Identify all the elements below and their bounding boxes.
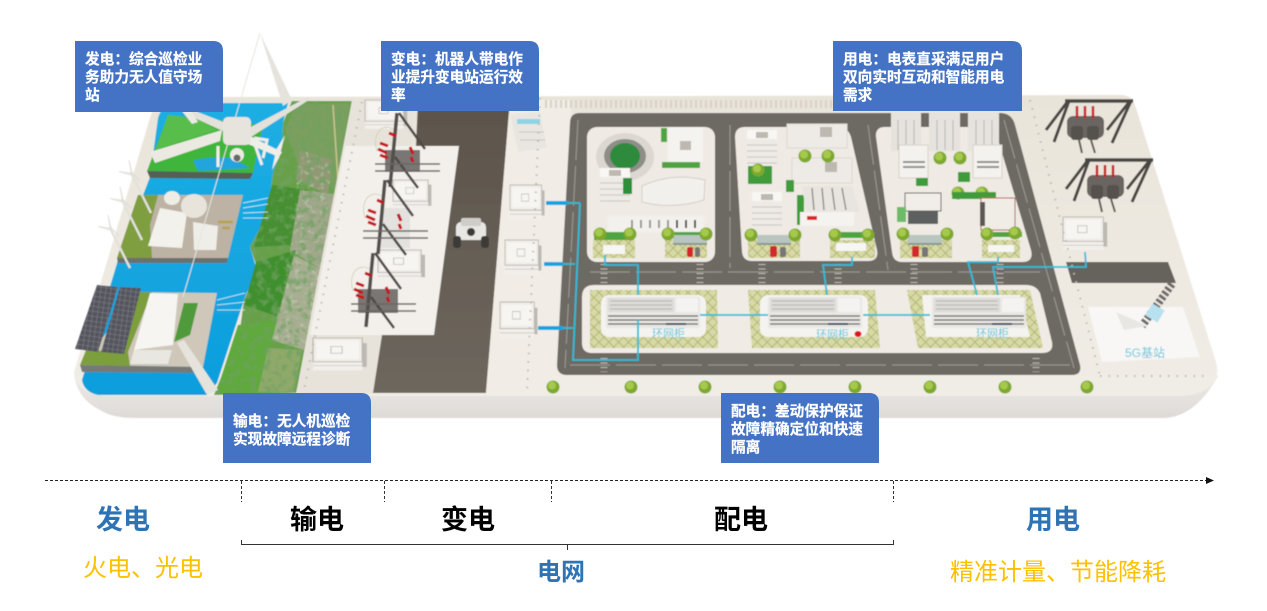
substation road: [373, 100, 510, 393]
stadium: [596, 133, 654, 181]
block 1 buildings: [593, 127, 712, 258]
distribution road network: [557, 113, 1080, 375]
concrete strip beside bank: [296, 100, 418, 394]
block 2: [735, 124, 877, 261]
stage dividers: [242, 481, 894, 502]
island: solar: [80, 292, 217, 373]
callout: substation: 率: [391, 86, 406, 104]
sublabel: consumption benefits: 精准计量、节能降耗: [950, 559, 1166, 586]
hatched ground 2: [748, 290, 880, 348]
timeline arrow: [45, 477, 1214, 484]
callout: consumption: 用电：电表直采满足用户: [843, 50, 1004, 68]
wind turbines: [98, 160, 151, 268]
label 3: 环网柜: [976, 327, 1009, 340]
callout: substation: 业提升变电站运行效: [391, 68, 523, 86]
sublabel: generation types: 火电、光电: [83, 555, 203, 582]
lower left arm: [150, 130, 222, 163]
5G tower: [1142, 284, 1172, 326]
label 2: 环网柜: [816, 328, 849, 341]
ring main unit 2: [768, 297, 862, 328]
street trees: [546, 380, 1094, 394]
bright foliage bottom: [216, 320, 276, 393]
drone camera: [230, 148, 244, 162]
stage label: transmission: 输电: [290, 505, 344, 535]
callout: distribution: 隔离: [731, 438, 760, 456]
callout: transmission: 实现故障远程诊断: [233, 430, 351, 448]
tower 3 transformer: [358, 289, 398, 313]
block 3 buildings: [891, 113, 1022, 258]
inner pad 2: [760, 295, 868, 337]
box 1: [510, 185, 545, 219]
rocky patch lower: [272, 255, 322, 350]
tower 1 transformer: [385, 150, 420, 172]
callout: consumption: 双向实时互动和智能用电: [843, 68, 1005, 86]
lower right arm: [248, 136, 282, 157]
forest speckle: [214, 101, 352, 395]
dense forest: [254, 185, 308, 247]
upper left arm: [186, 109, 226, 132]
illustrated grid scene: [74, 33, 1218, 418]
dish: [1116, 312, 1148, 330]
road markings: [565, 120, 1074, 368]
power wires over river: [217, 198, 268, 310]
hatched ground 1: [590, 290, 718, 348]
platform front face: [74, 368, 1218, 418]
solar panels: [75, 285, 141, 354]
grid bracket: [242, 540, 894, 550]
callout: generation: 务助力无人值守场: [85, 68, 203, 86]
drone legs: [218, 138, 267, 167]
drone flight line: [183, 33, 260, 297]
callout: generation: [75, 41, 223, 112]
inner pad 3: [922, 295, 1030, 337]
label: 5G基站: [1125, 346, 1165, 360]
callout: substation: [381, 41, 539, 111]
callout: substation: 变电：机器人带电作: [391, 50, 523, 68]
river bank terrain: [214, 101, 352, 395]
red indicator dot: [854, 331, 862, 337]
border tick marks: [304, 98, 1210, 392]
island: green hill: [147, 115, 263, 179]
label: grid: 电网: [537, 559, 585, 586]
pale foliage bottom right: [258, 348, 302, 392]
callout: transmission: 输电：无人机巡检: [233, 412, 351, 430]
inner pad 1: [601, 295, 706, 337]
live-line work robot: [453, 218, 489, 248]
bank base: [214, 101, 352, 395]
propeller lower right: [272, 135, 285, 170]
rocky patch middle: [290, 190, 334, 270]
top building: [510, 112, 547, 152]
lower blade: [177, 340, 218, 395]
callout: consumption: [833, 41, 1022, 111]
drone: [150, 33, 312, 395]
platform top surface: [74, 95, 1217, 396]
label 1: 环网柜: [652, 327, 685, 340]
rocky patch upper: [296, 150, 332, 195]
hatched ground 3: [907, 290, 1043, 348]
5G base station: [1088, 284, 1200, 362]
block 3: [876, 113, 1032, 262]
callout: distribution: 故障精确定位和快速: [731, 420, 863, 438]
drone body: [223, 117, 251, 145]
substation towers: [351, 113, 440, 328]
pale track: [333, 105, 339, 195]
pale transformer block: [380, 208, 410, 248]
propeller upper left: [178, 95, 198, 124]
distribution boxes: [500, 112, 547, 338]
upper pale vegetation: [285, 103, 350, 190]
box 3: [500, 302, 537, 338]
propeller blade tall: [260, 33, 292, 106]
island: thermal power: [117, 191, 243, 263]
user transformer box: [1063, 217, 1107, 250]
platform: [74, 95, 1218, 418]
stage label: substation: 变电: [441, 505, 495, 535]
box 2: [505, 240, 541, 274]
ring main unit 1: [606, 297, 700, 328]
block 1: [587, 127, 715, 262]
right substation units: [1046, 101, 1153, 212]
upper right arm: [249, 97, 312, 137]
callout: generation: 站: [85, 87, 100, 104]
stage label: generation: 发电: [96, 505, 150, 535]
callout: consumption: 需求: [843, 86, 873, 104]
callout: generation: 发电：综合巡检业: [85, 50, 202, 68]
east road extension: [1066, 262, 1176, 283]
block 2 buildings: [744, 124, 875, 258]
strip right of substation road: [486, 100, 572, 393]
ring main unit zone: [582, 285, 1052, 353]
callout: transmission: [223, 393, 371, 463]
substation white pad: [310, 146, 459, 335]
forest lower: [244, 250, 296, 318]
callout: distribution: [721, 393, 879, 463]
stage label: distribution: 配电: [714, 505, 768, 535]
rock speckle: [272, 150, 332, 350]
water channel: [82, 103, 288, 395]
stage label: consumption: 用电: [1026, 505, 1080, 535]
cyan power lines: [538, 203, 1086, 360]
substation boxes: [313, 100, 431, 370]
signal tile: [1145, 303, 1165, 323]
callout: distribution: 配电：差动保护保证: [731, 402, 863, 420]
ring main unit 3: [932, 297, 1026, 328]
